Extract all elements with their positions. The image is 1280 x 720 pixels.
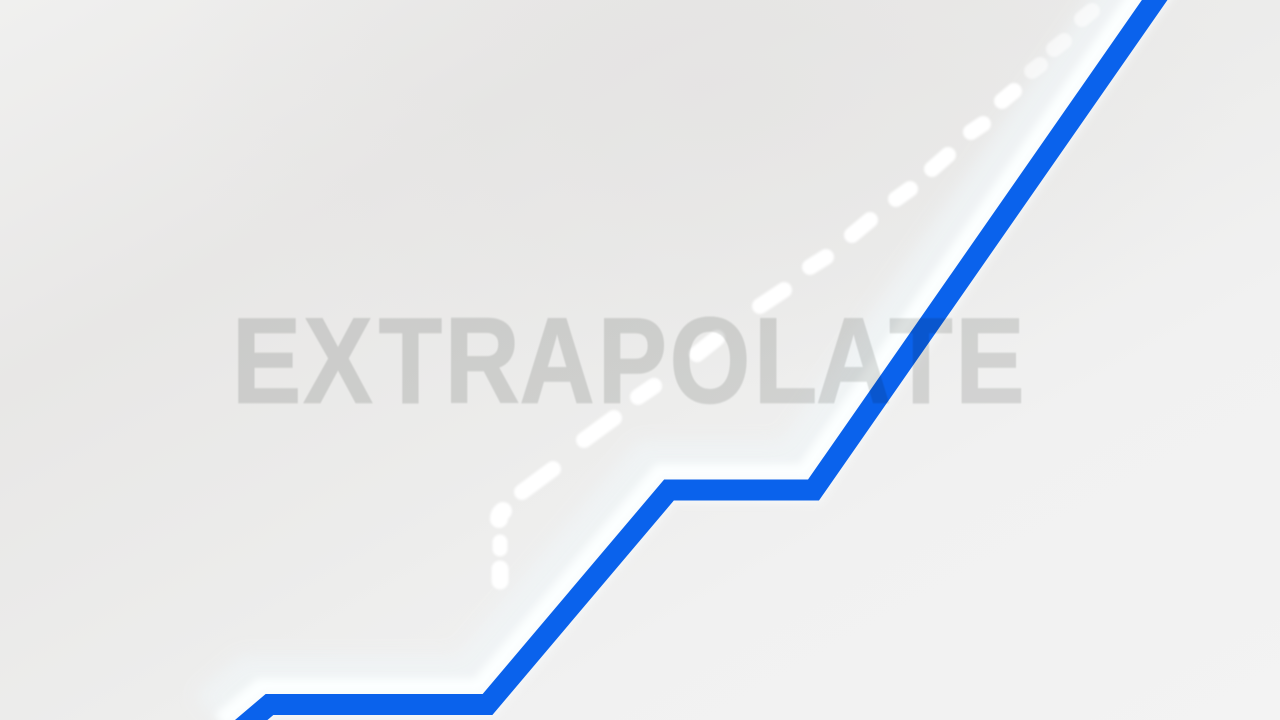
blue data line	[230, 0, 1170, 720]
heading: EXTRAPOLATE: EXTRAPOLATE	[232, 293, 1025, 428]
dashes showing through heading	[638, 338, 717, 397]
glow around blue line	[210, 0, 1170, 720]
dashed white projection line	[499, 11, 1092, 581]
